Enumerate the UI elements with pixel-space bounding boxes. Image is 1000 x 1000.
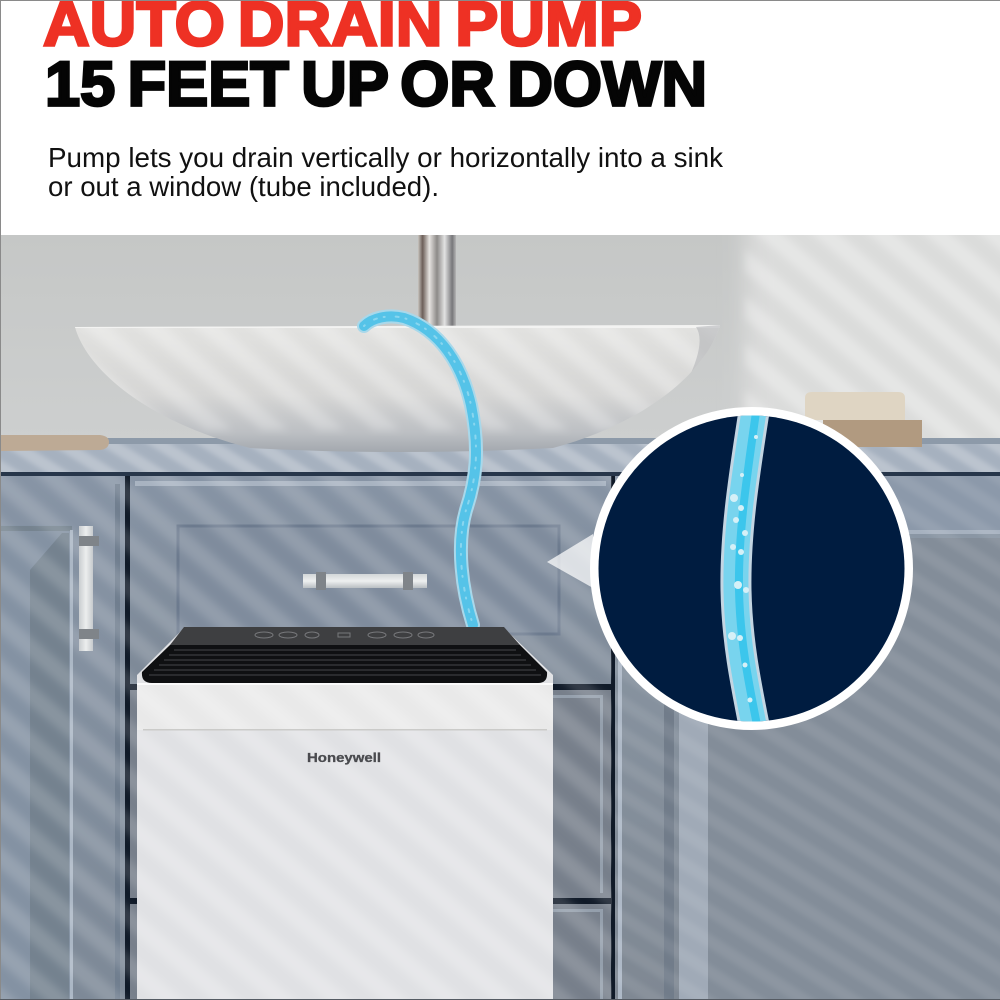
control panel: [170, 627, 520, 645]
dehumidifier: [137, 627, 553, 999]
middle drawer: [130, 690, 611, 898]
faucet: [418, 235, 456, 327]
bathroom wall: [1, 235, 1000, 438]
drain tube: [364, 316, 476, 625]
air grille: [142, 645, 547, 683]
vessel sink bowl: [75, 325, 720, 452]
left soap dish: [0, 435, 109, 451]
upper drawer: [130, 476, 611, 684]
countertop: [1, 438, 1000, 476]
heading: 15 feet up or down: 15 FEET UP OR DOWN: [45, 50, 707, 120]
white header background: [0, 0, 1000, 236]
left cabinet door: [0, 476, 125, 1000]
left door handle: [79, 526, 99, 651]
brand logo: Honeywell: [307, 750, 381, 765]
description text: or out a window (tube included).: [48, 171, 439, 202]
drawer handle: [303, 572, 427, 590]
magnified tube callout: [590, 405, 913, 730]
right soap and dish: [805, 392, 922, 447]
description text: [48, 142, 724, 202]
cabinet base: [0, 476, 1000, 1000]
right cabinet door: [600, 450, 1000, 1000]
lower drawer: [130, 904, 611, 1000]
description text: Pump lets you drain vertically or horizontally into a sink: [48, 142, 724, 173]
callout pointer: [547, 534, 593, 588]
panel icons: [255, 632, 434, 638]
soft sunlight stripes on left cabinets: [1, 476, 612, 999]
